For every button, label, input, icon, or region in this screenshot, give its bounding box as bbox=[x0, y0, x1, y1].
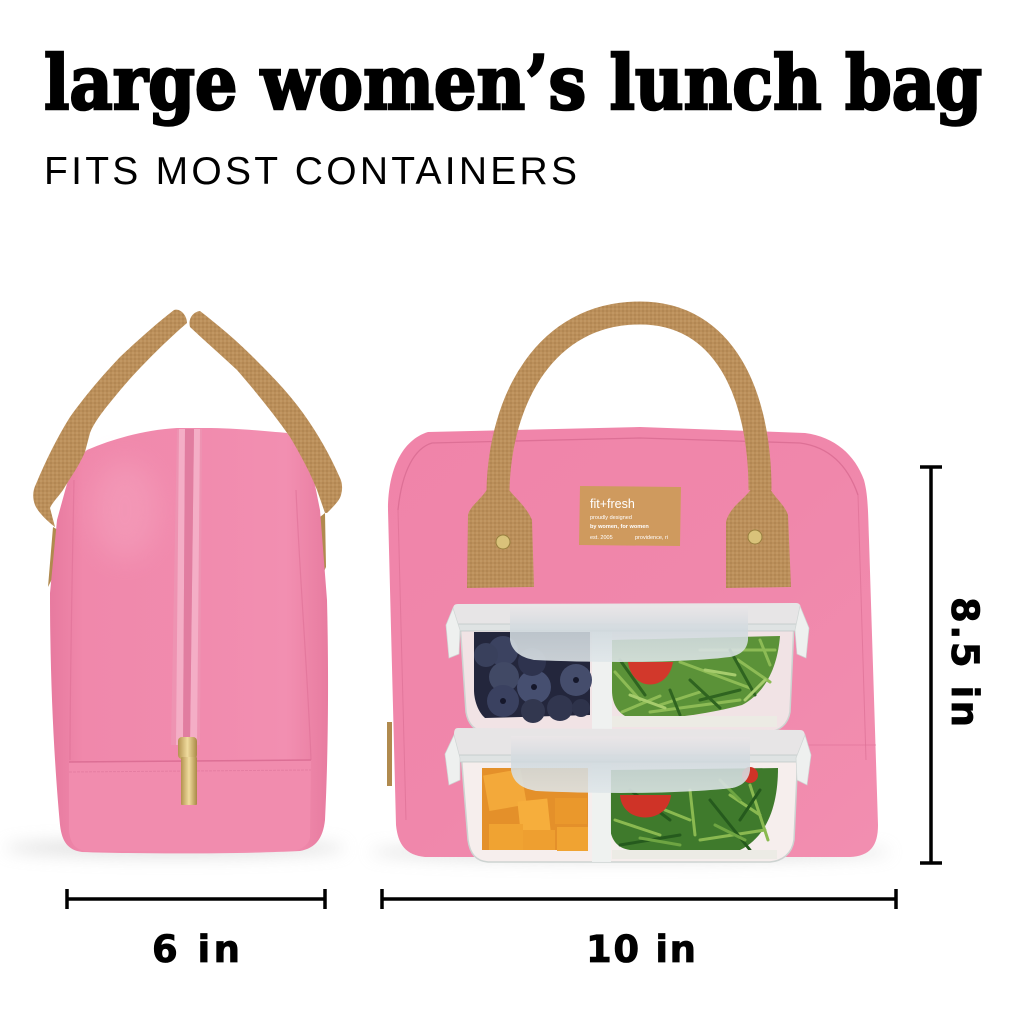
brand label bbox=[579, 486, 681, 546]
right handle tab bbox=[726, 484, 791, 588]
brand label: est. 2005 bbox=[590, 535, 613, 541]
top container glass body bbox=[460, 622, 794, 732]
top lid clips bbox=[446, 606, 809, 658]
top container lid bbox=[453, 603, 801, 625]
side bag highlight bbox=[91, 460, 159, 560]
top container divider bbox=[592, 625, 612, 732]
side bag left handle bbox=[33, 310, 187, 527]
side bag body bbox=[50, 428, 328, 853]
side bag strap tails bbox=[48, 513, 326, 587]
bottom container lid bbox=[454, 728, 805, 757]
bottom container glass body bbox=[461, 752, 798, 862]
blueberries bbox=[474, 632, 592, 723]
width dimension 10 in: 10 in bbox=[586, 928, 696, 971]
width dimension 6 in bbox=[67, 889, 325, 971]
subtitle: FITS MOST CONTAINERS bbox=[44, 150, 577, 193]
top glass container bbox=[446, 603, 809, 732]
width dimension 6 in: 6 in bbox=[152, 928, 240, 971]
bottom glass container bbox=[445, 728, 811, 862]
width dimension 10 in bbox=[382, 889, 896, 971]
front view lunch bag bbox=[370, 313, 890, 861]
height dimension 8.5 in: 8.5 in bbox=[943, 597, 986, 727]
side view lunch bag bbox=[5, 310, 345, 857]
top salad bbox=[612, 636, 780, 727]
height dimension 8.5 in bbox=[920, 467, 986, 863]
zipper bbox=[171, 429, 202, 745]
front bag handle bbox=[498, 313, 760, 490]
brand label: by women, for women bbox=[590, 524, 649, 530]
side bag right handle bbox=[189, 311, 342, 513]
bottom lid flap bbox=[511, 736, 750, 793]
bottom salad bbox=[610, 767, 778, 859]
bottom container divider bbox=[592, 755, 611, 862]
orange cubes bbox=[482, 768, 588, 851]
brand label: providence, ri bbox=[635, 535, 668, 541]
brand label: proudly designed bbox=[590, 515, 632, 521]
top lid flap bbox=[510, 605, 748, 662]
side bag bottom panel bbox=[69, 760, 311, 851]
bottom lid clips bbox=[445, 735, 811, 785]
zipper pull bbox=[178, 737, 197, 805]
front bag body bbox=[388, 427, 878, 857]
brand label: fit+fresh bbox=[590, 497, 635, 511]
left handle tab bbox=[467, 484, 534, 588]
